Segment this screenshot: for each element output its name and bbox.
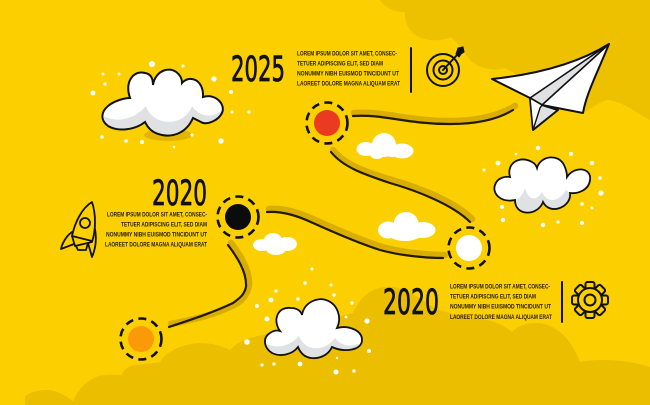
year heading: 2020 right: 2020 — [383, 283, 439, 323]
milestone: red — [306, 102, 348, 144]
cloud: small centre top — [356, 133, 414, 159]
paper plane — [492, 44, 609, 130]
cloud: small centre — [378, 212, 436, 241]
text block: 2020 left: TETUER ADIPISCING ELIT, SED DIAM — [121, 222, 207, 228]
divider: 2020 right — [561, 282, 563, 322]
text block: 2025: LOREM IPSUM DOLOR SIT AMET, CONSEC- — [297, 50, 397, 58]
route line: orange to black — [169, 245, 246, 327]
text block: 2020 left: LAOREET DOLORE MAGNA ALIQUAM ERAT — [105, 242, 207, 248]
milestone: white — [448, 228, 490, 268]
text block: 2020 left — [105, 212, 207, 248]
sparkle dots — [91, 61, 604, 375]
text block: 2020 right: NONUMMY NIBH EUISMOD TINCIDUNT UT — [450, 304, 551, 310]
divider: 2025 — [410, 48, 412, 92]
path shadows — [171, 106, 515, 324]
year heading: 2025: 2025 — [231, 50, 285, 90]
text block: 2020 right: LOREM IPSUM DOLOR SIT AMET, CONSEC- — [450, 284, 550, 290]
text block: 2025 — [297, 50, 400, 88]
text block: 2025: NONUMMY NIBH EUISMOD TINCIDUNT UT — [297, 70, 399, 78]
year heading: 2020 left: 2020 — [152, 174, 207, 214]
cloud: upper left — [102, 70, 223, 141]
text block: 2020 left: NONUMMY NIBH EUISMOD TINCIDUNT UT — [106, 232, 207, 238]
milestone: orange — [120, 318, 162, 360]
icon: gear — [572, 282, 608, 318]
cloud: bottom — [265, 299, 362, 358]
route line: red to white — [331, 152, 470, 222]
cloud: right — [494, 157, 590, 213]
text block: 2020 right — [450, 284, 552, 321]
icon: rocket — [61, 202, 96, 257]
route line: black to white — [267, 212, 443, 258]
darker cloud shape: top right — [380, 0, 650, 120]
route line: red to plane — [353, 110, 513, 124]
milestone: black — [218, 196, 258, 238]
text block: 2025: LAOREET DOLORE MAGNA ALIQUAM ERAT — [297, 80, 400, 88]
text block: 2020 right: TETUER ADIPISCING ELIT, SED DIAM — [450, 294, 536, 300]
icon: target — [427, 47, 464, 86]
text block: 2020 left: LOREM IPSUM DOLOR SIT AMET, CONSEC- — [107, 212, 207, 218]
text block: 2020 right: LAOREET DOLORE MAGNA ALIQUAM ERAT — [450, 314, 552, 321]
cloud: small left — [253, 233, 297, 255]
darker cloud shape: bottom — [25, 287, 650, 405]
text block: 2025: TETUER ADIPISCING ELIT, SED DIAM — [297, 60, 383, 68]
